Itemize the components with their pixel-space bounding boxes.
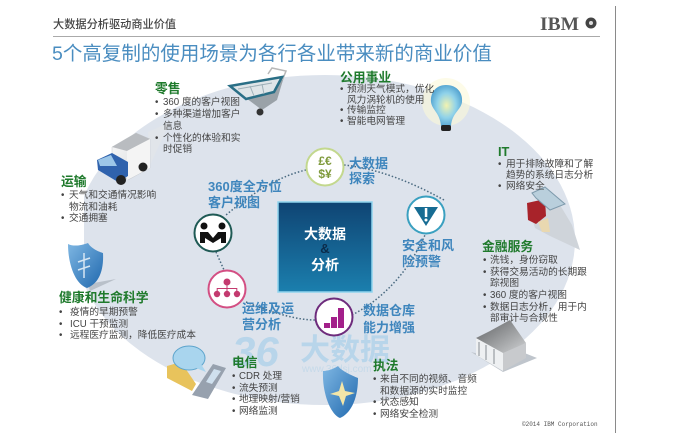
panel: 金融服务: 数据日志分析，用于内 [490, 300, 587, 313]
center labels: 大数据 [349, 156, 388, 171]
panel: 金融服务: • [483, 290, 486, 301]
page frame line [614, 6, 616, 433]
panel: 金融服务: 踪视图 [490, 276, 519, 289]
panel: IT: 用于排除故障和了解 [506, 157, 593, 170]
panel: 健康和生命科学 [59, 290, 196, 341]
panel: 零售: • [155, 133, 158, 144]
panel: 执法: • [373, 397, 376, 408]
panel: 零售: • [155, 109, 158, 120]
panel: 金融服务: 360 度的客户视图 [490, 288, 567, 301]
panel: 公用事业: 公用事业 [340, 70, 391, 85]
panel: 健康和生命科学: • [59, 307, 62, 318]
panel: IT: 网络安全 [506, 179, 545, 192]
panel: 金融服务: 金融服务 [482, 239, 533, 254]
panel: 金融服务: • [483, 267, 486, 278]
panel: 金融服务: 洗钱，身份窃取 [490, 253, 558, 266]
main title: 5个高复制的使用场景为各行各业带来新的商业价值 [52, 43, 492, 65]
panel: 零售 [155, 81, 241, 155]
panel: 零售: 个性化的体验和实 [163, 131, 241, 144]
panel: 执法: 来自不同的视频、音频 [380, 372, 477, 385]
panel: 电信 [232, 355, 300, 417]
watermark: 大数据 [300, 334, 390, 367]
central box: 分析 [311, 257, 339, 273]
center labels: 数据仓库 [363, 303, 415, 318]
icon: currency: $¥ [318, 167, 332, 181]
center labels: 客户视图 [208, 195, 260, 210]
panel: 运输: • [61, 190, 64, 201]
icon: currency [306, 148, 344, 186]
central box [278, 202, 372, 292]
background ellipse [75, 75, 575, 405]
panel: 金融服务: • [483, 255, 486, 266]
icon: truck [97, 122, 170, 185]
icon: bank [471, 320, 537, 372]
panel: 电信: 地理映射/营销 [239, 392, 300, 405]
icon: message and phone [167, 346, 226, 399]
panel: 健康和生命科学: • [59, 319, 62, 330]
panel: 运输: 交通拥塞 [69, 211, 108, 224]
logo: IBM: IBM [540, 14, 579, 35]
panel: IT: • [498, 181, 501, 192]
panel: 电信: CDR 处理 [239, 370, 282, 382]
panel: 运输: 物流和油耗 [69, 200, 118, 213]
panel: 执法: 和数据源的实时监控 [380, 384, 467, 397]
panel: 金融服务: 获得交易活动的长期跟 [490, 265, 587, 278]
panel: 公用事业: 风力涡轮机的使用 [347, 93, 424, 106]
central box: & [320, 241, 330, 256]
panel: 零售: 时促销 [163, 142, 192, 155]
panel: 健康和生命科学: 健康和生命科学 [59, 290, 149, 305]
panel: 健康和生命科学: • [59, 330, 62, 341]
center labels: 营分析 [242, 317, 281, 332]
watermark: 36 [232, 328, 279, 375]
center labels [208, 156, 454, 335]
icon: IT server [527, 187, 580, 250]
center labels: 安全和风 [402, 238, 454, 253]
panel: 公用事业: • [340, 116, 343, 127]
logo: IBM [540, 14, 596, 35]
panel: 金融服务: 部审计与合规性 [490, 311, 558, 324]
panel: 电信: 电信 [232, 355, 258, 370]
panel: 电信: • [232, 394, 235, 405]
icon: warning [408, 196, 444, 234]
center labels: 险预警 [402, 254, 441, 269]
icon: bars [316, 298, 352, 336]
panel: 公用事业: 预测天气模式，优化 [347, 82, 434, 95]
panel: 电信: • [232, 383, 235, 394]
icon: currency: £€ [318, 154, 332, 168]
icon: light bulb [422, 78, 470, 131]
watermark [232, 328, 390, 375]
panel: 电信: 流失预测 [239, 381, 278, 394]
panel: 电信: 网络监测 [239, 404, 278, 417]
panel: 运输: 天气和交通情况影响 [69, 188, 156, 201]
center labels: 360度全方位 [208, 179, 282, 194]
icon: hierarchy [208, 270, 246, 308]
panel: 公用事业: • [340, 84, 343, 95]
panel: 电信: • [232, 371, 235, 382]
copyright: ©2014 IBM Corporation [522, 421, 598, 428]
panel: 零售: 信息 [163, 119, 183, 132]
panel: 零售: 零售 [155, 81, 181, 96]
panel: 零售: 360 度的客户视图 [163, 95, 240, 108]
header rule [53, 36, 600, 38]
panel: IT: IT [498, 144, 510, 159]
panel: 电信: • [232, 406, 235, 417]
icon: shopping cart [230, 68, 286, 116]
central box: 大数据 [304, 226, 346, 242]
dotted cycle [216, 165, 444, 320]
panel: 执法: • [373, 374, 376, 385]
panel: IT: • [498, 159, 501, 170]
panel: 健康和生命科学: ICU 干预监测 [70, 317, 128, 330]
panel: 执法: 网络安全检测 [380, 407, 438, 420]
panel: 执法 [373, 358, 477, 420]
panel: 健康和生命科学: 远程医疗监测，降低医疗成本 [70, 328, 196, 341]
center labels: 运维及运 [242, 301, 294, 316]
panel: IT [498, 144, 593, 192]
panel: 运输: 运输 [61, 174, 87, 189]
panel: 公用事业: 智能电网管理 [347, 114, 405, 127]
panel: 零售: • [155, 97, 158, 108]
center labels: 能力增强 [363, 320, 415, 335]
panel: 金融服务: • [483, 302, 486, 313]
panel: 执法: • [373, 409, 376, 420]
center labels: 探索 [349, 171, 375, 186]
panel: 健康和生命科学: 疫情的早期预警 [70, 305, 138, 318]
panel: 公用事业: • [340, 105, 343, 116]
icon: shield star [323, 366, 358, 418]
panel: 运输: • [61, 213, 64, 224]
panel: 运输 [61, 174, 156, 224]
panel: IT: 趋势的系统日志分析 [506, 168, 593, 181]
panel: 公用事业: 传输监控 [347, 103, 386, 116]
panel: 金融服务 [482, 239, 587, 324]
panel: 执法: 执法 [373, 358, 399, 373]
icon: people [194, 214, 232, 252]
panel: 执法: 状态感知 [380, 395, 419, 408]
panel: 公用事业 [340, 70, 434, 127]
header small title: 大数据分析驱动商业价值 [53, 17, 176, 31]
panel: 零售: 多种渠道增加客户 [163, 107, 240, 120]
icon: shield blue [68, 243, 116, 291]
watermark: www.36dsj.com [301, 364, 371, 375]
